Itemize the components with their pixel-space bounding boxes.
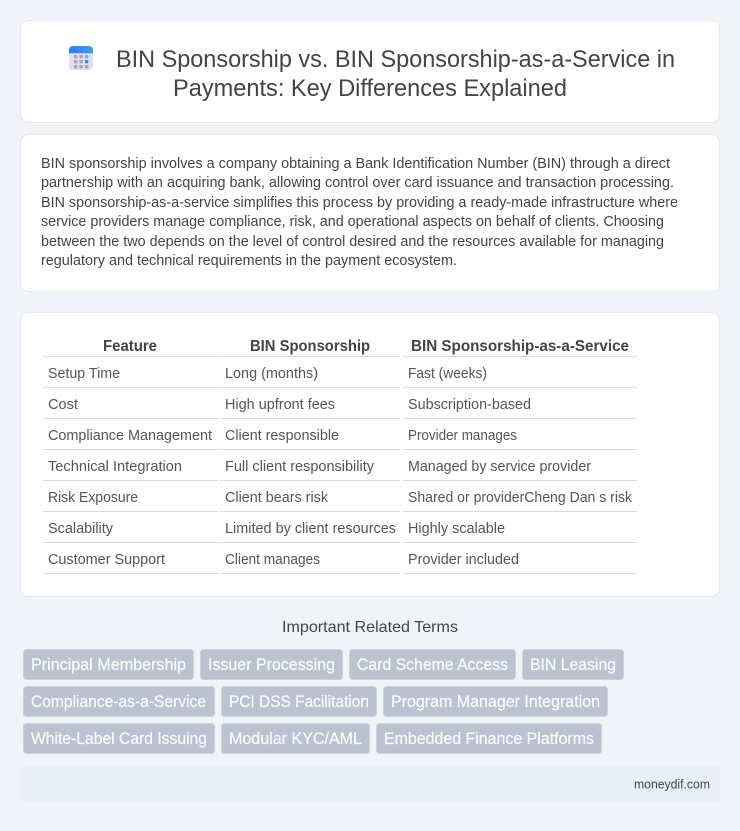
tag: Program Manager Integration (384, 686, 608, 716)
title (116, 46, 675, 102)
tag: Compliance-as-a-Service: Compliance-as-a-Service (31, 693, 206, 711)
tag: White-Label Card Issuing: White-Label Card Issuing (31, 730, 207, 748)
related term tags (24, 650, 624, 754)
row: Customer Support: Client manages (225, 552, 320, 568)
description text (41, 156, 678, 269)
row: Scalability: Highly scalable (408, 521, 505, 537)
row: Risk Exposure: Client bears risk (225, 490, 329, 506)
description text: partnership with an acquiring bank, allowing control over card issuance and transaction processing. (41, 175, 674, 191)
row: Compliance Management: Client responsible (225, 428, 339, 444)
tag: Modular KYC/AML (222, 724, 370, 754)
tag: Principal Membership: Principal Membership (31, 656, 186, 674)
row: Customer Support: Customer Support (48, 552, 165, 568)
tag: Embedded Finance Platforms: Embedded Finance Platforms (384, 730, 594, 748)
heading: related terms: Important Related Terms (282, 619, 458, 636)
title: BIN Sponsorship vs. BIN Sponsorship-as-a-Service in (116, 46, 675, 73)
row: Scalability: Scalability (48, 521, 114, 537)
tag: BIN Leasing: BIN Leasing (530, 656, 616, 674)
table header: Feature (103, 338, 157, 355)
tag: PCI DSS Facilitation: PCI DSS Facilitation (229, 693, 369, 711)
description text: between the two depends on the level of control desired and the resources available for managing (41, 234, 664, 250)
row: Technical Integration: Full client responsibility (225, 459, 375, 475)
panel: comparison table (20, 312, 720, 596)
description text: BIN sponsorship-as-a-service simplifies this process by providing a ready-made infrastructure where (41, 195, 678, 211)
table header (43, 338, 637, 356)
tag: Embedded Finance Platforms (376, 724, 602, 754)
row: Setup Time: Long (months) (225, 366, 318, 382)
row: Cost (43, 397, 637, 418)
row: Setup Time: Setup Time (48, 366, 120, 382)
panel: title header (20, 20, 720, 122)
table header: BIN Sponsorship-as-a-Service (411, 338, 629, 355)
row: Technical Integration: Managed by service provider (408, 459, 591, 475)
tag: Principal Membership (24, 650, 194, 680)
tag: BIN Leasing (522, 650, 624, 680)
description text: service providers manage compliance, risk, and operational aspects on behalf of clients. Choosing (41, 214, 664, 230)
panel: description (20, 134, 720, 292)
tag: Modular KYC/AML: Modular KYC/AML (229, 730, 362, 748)
tag: Program Manager Integration: Program Manager Integration (391, 693, 600, 711)
row: Compliance Management: Compliance Management (48, 428, 212, 444)
tag: Card Scheme Access (350, 650, 516, 680)
row: Technical Integration: Technical Integration (48, 459, 182, 475)
row: Compliance Management: Provider manages (408, 428, 517, 444)
title: Payments: Key Differences Explained (173, 75, 567, 102)
tag: Compliance-as-a-Service (24, 686, 214, 716)
row: Technical Integration (43, 459, 637, 480)
row: Scalability (43, 521, 637, 542)
tag: PCI DSS Facilitation (222, 686, 376, 716)
row: Setup Time (43, 366, 637, 388)
row: Customer Support: Provider included (408, 552, 519, 568)
row: Cost: Cost (48, 397, 78, 413)
row: Compliance Management (43, 428, 637, 450)
table header: BIN Sponsorship (250, 338, 370, 355)
row: Risk Exposure (43, 490, 637, 512)
icon: calendar grid (69, 46, 93, 70)
row: Risk Exposure: Risk Exposure (48, 490, 138, 506)
tag: White-Label Card Issuing (24, 724, 214, 754)
row: Scalability: Limited by client resources (225, 521, 396, 537)
description text: regulatory and technical requirements in the payment ecosystem. (41, 253, 457, 269)
footer bar: moneydif.com (634, 776, 710, 792)
description text: BIN sponsorship involves a company obtaining a Bank Identification Number (BIN) through a direct (41, 156, 670, 172)
row: Risk Exposure: Shared or providerCheng Dan s risk (408, 490, 633, 506)
row: Setup Time: Fast (weeks) (408, 366, 487, 382)
tag: Issuer Processing (200, 650, 342, 680)
row: Customer Support (43, 552, 637, 574)
tag: Card Scheme Access: Card Scheme Access (357, 656, 508, 674)
row: Cost: High upfront fees (225, 397, 335, 413)
tag: Issuer Processing: Issuer Processing (208, 656, 335, 674)
row: Cost: Subscription-based (408, 397, 531, 413)
footer bar (20, 767, 720, 801)
